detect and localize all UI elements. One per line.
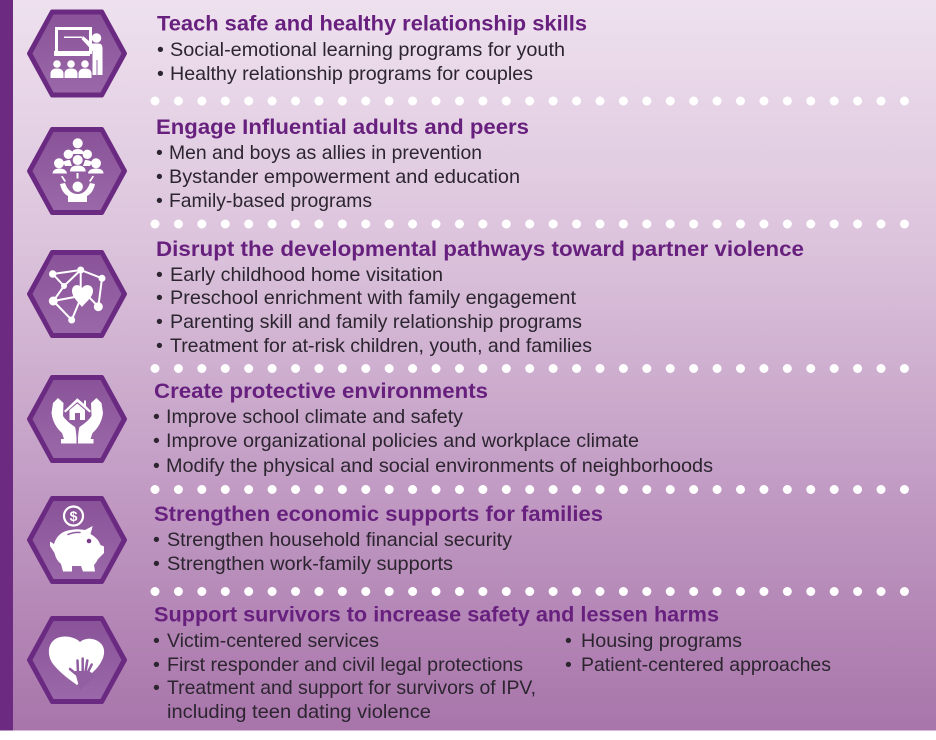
bullet list: engage adults bbox=[156, 142, 520, 212]
section: support survivors bbox=[153, 604, 831, 723]
bullet list: support survivors right column: Patient-centered approaches bbox=[581, 654, 831, 676]
icon: piggy bank hexagon bbox=[29, 498, 125, 582]
bullet list: engage adults: Family-based programs bbox=[169, 190, 372, 212]
bullet list: protective environments: • bbox=[153, 455, 160, 477]
bullet list: support survivors left column: • bbox=[153, 654, 160, 676]
left accent bar bbox=[0, 0, 13, 730]
bullet list: protective environments: • bbox=[153, 406, 160, 428]
heading: support survivors: Support survivors to increase safety and lessen harms bbox=[154, 604, 719, 626]
icon: network heart hexagon bbox=[29, 252, 125, 336]
icon: teaching hexagon bbox=[29, 12, 125, 96]
bullet list: support survivors left column: First responder and civil legal protections bbox=[167, 654, 523, 676]
bullet list: support survivors right column: • bbox=[565, 630, 572, 652]
heading: economic supports: Strengthen economic supports for families bbox=[154, 503, 603, 526]
bullet list: support survivors left column: including teen dating violence bbox=[167, 701, 431, 723]
icon: influential adults hexagon bbox=[29, 129, 125, 213]
bullet list: disrupt pathways: Treatment for at-risk children, youth, and families bbox=[170, 335, 592, 357]
bullet list: disrupt pathways: Preschool enrichment with family engagement bbox=[170, 287, 577, 309]
section: engage influential adults and peers bbox=[156, 116, 529, 212]
heading: disrupt pathways: Disrupt the developmental pathways toward partner violence bbox=[156, 238, 804, 261]
bullet list: support survivors left column bbox=[153, 630, 536, 723]
bullet list: protective environments: Improve organizational policies and workplace climate bbox=[166, 430, 639, 452]
bullet list: economic supports: Strengthen household financial security bbox=[167, 529, 512, 551]
bullet list: support survivors left column: Victim-centered services bbox=[167, 630, 379, 652]
section: disrupt developmental pathways bbox=[156, 238, 804, 357]
bullet list: economic supports: • bbox=[153, 529, 160, 551]
icon: hands and house hexagon bbox=[29, 377, 125, 461]
bullet list: engage adults: Men and boys as allies in prevention bbox=[169, 142, 482, 164]
bullet list: engage adults: • bbox=[156, 166, 163, 188]
bullet list: disrupt pathways: • bbox=[156, 311, 163, 333]
section: teach safe and healthy relationship skills bbox=[157, 12, 587, 85]
bullet list: support survivors right column: Housing programs bbox=[581, 630, 742, 652]
bullet list: economic supports: Strengthen work-family supports bbox=[167, 553, 453, 575]
heading: teach skills: Teach safe and healthy relationship skills bbox=[157, 12, 587, 36]
bullet list: disrupt pathways: • bbox=[156, 264, 163, 286]
section: strengthen economic supports bbox=[153, 503, 603, 575]
bullet list: disrupt pathways: • bbox=[156, 335, 163, 357]
bullet list: protective environments bbox=[153, 406, 713, 477]
bullet list: support survivors left column: Treatment and support for survivors of IPV, bbox=[167, 677, 536, 699]
bullet list: engage adults: Bystander empowerment and education bbox=[169, 166, 520, 188]
bullet list: economic supports: • bbox=[153, 553, 160, 575]
bullet list: engage adults: • bbox=[156, 142, 163, 164]
bullet list: economic supports bbox=[153, 529, 512, 575]
bullet list: teach skills: • bbox=[157, 39, 164, 61]
bullet list: teach skills: Social-emotional learning programs for youth bbox=[170, 39, 565, 61]
bullet list: support survivors right column: • bbox=[565, 654, 572, 676]
bullet list: disrupt pathways: Early childhood home visitation bbox=[170, 264, 443, 286]
bullet list: support survivors right column bbox=[565, 630, 831, 676]
icon: piggy bank hexagon: $ bbox=[70, 508, 78, 524]
icon: heart and hand hexagon bbox=[29, 618, 125, 702]
bullet list: protective environments: • bbox=[153, 430, 160, 452]
bullet list: support survivors left column: • bbox=[153, 677, 160, 699]
section: create protective environments bbox=[153, 380, 713, 477]
bullet list: disrupt pathways: • bbox=[156, 287, 163, 309]
heading: protective environments: Create protective environments bbox=[154, 380, 488, 403]
bullet list: disrupt pathways bbox=[156, 264, 592, 357]
bullet list: protective environments: Modify the physical and social environments of neighborhoods bbox=[166, 455, 713, 477]
bullet list: teach skills bbox=[157, 39, 565, 85]
bullet list: protective environments: Improve school climate and safety bbox=[166, 406, 463, 428]
bullet list: teach skills: • bbox=[157, 63, 164, 85]
bullet list: teach skills: Healthy relationship programs for couples bbox=[170, 63, 533, 85]
bullet list: support survivors left column: • bbox=[153, 630, 160, 652]
bullet list: engage adults: • bbox=[156, 190, 163, 212]
bullet list: disrupt pathways: Parenting skill and family relationship programs bbox=[170, 311, 582, 333]
heading: engage adults: Engage Influential adults and peers bbox=[156, 116, 529, 139]
